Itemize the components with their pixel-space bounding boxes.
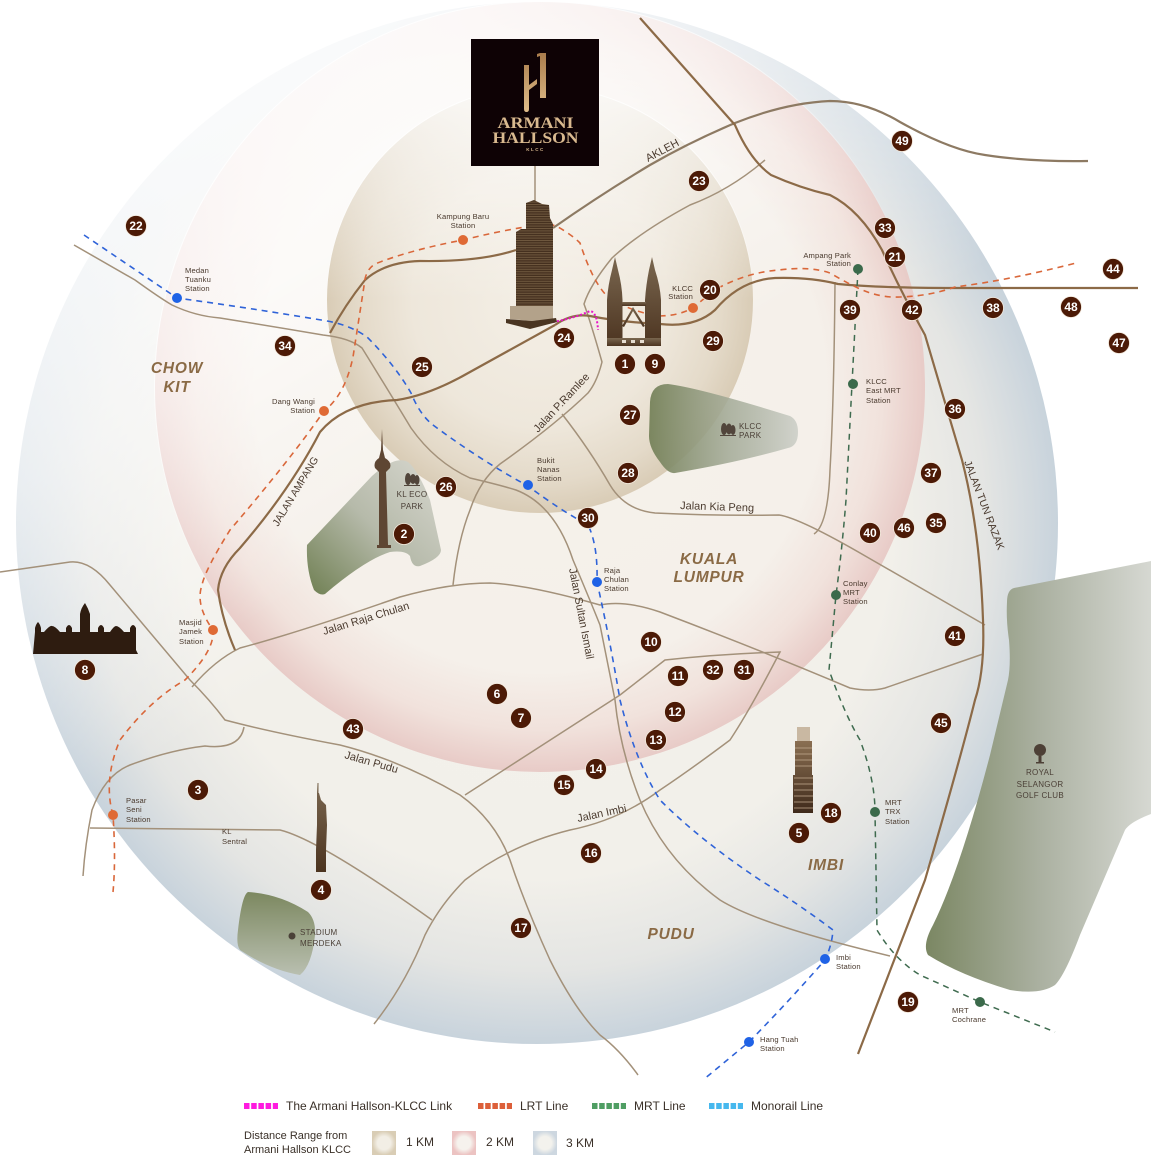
numbered markers: 2: [401, 527, 408, 541]
station labels: Station: [290, 406, 315, 415]
numbered markers: 28: [621, 466, 635, 480]
numbered markers: 22: [129, 219, 143, 233]
numbered markers: 16: [584, 846, 598, 860]
legend: 3 KM swatch: [533, 1131, 594, 1155]
numbered markers: 24: [557, 331, 571, 345]
park: Stadium Merdeka: [237, 892, 315, 975]
legend: distance range caption: Armani Hallson KLCC: [244, 1144, 351, 1156]
station labels: Station: [760, 1044, 785, 1053]
station labels: Station: [604, 584, 629, 593]
road labels: Jalan Imbi: [576, 803, 628, 825]
road labels: Jalan Kia Peng: [680, 500, 754, 515]
numbered markers: 32: [706, 663, 720, 677]
numbered markers: 39: [843, 303, 857, 317]
station labels: Kampung Baru: [437, 212, 489, 221]
park: Royal Selangor Golf Club: [926, 561, 1151, 992]
station labels: MRT: [885, 798, 902, 807]
numbered markers: 30: [581, 511, 595, 525]
building: Petronas Twin Towers: [607, 257, 661, 346]
numbered markers: 13: [649, 733, 663, 747]
station labels: Nanas: [537, 465, 560, 474]
label: Stadium Merdeka: MERDEKA: [300, 939, 342, 948]
label: Royal Selangor Golf Club: ROYAL: [1026, 768, 1054, 777]
station labels: Station: [179, 637, 204, 646]
station labels: Station: [185, 284, 210, 293]
road labels: Jalan P.Ramlee: [531, 371, 592, 435]
building: Sultan Abdul Samad: [33, 603, 138, 654]
numbered markers: 40: [863, 526, 877, 540]
logo: Armani Hallson KLCC: [471, 39, 599, 166]
road labels: AKLEH: [644, 137, 681, 165]
legend: [244, 1099, 823, 1156]
district labels: PUDU: [647, 926, 695, 943]
MRT line: [829, 269, 1055, 1032]
legend: Monorail line: Monorail Line: [751, 1099, 823, 1113]
icon: KLCC Park trees: [720, 423, 736, 436]
numbered markers: 5: [796, 826, 803, 840]
road labels: Jalan Sultan Ismail: [566, 567, 595, 660]
station labels: Medan: [185, 266, 209, 275]
numbered markers: 31: [737, 663, 751, 677]
numbered markers: 14: [589, 762, 603, 776]
station labels: Seni: [126, 805, 142, 814]
numbered markers: 33: [878, 221, 892, 235]
numbered markers: 15: [557, 778, 571, 792]
station labels: Station: [843, 597, 868, 606]
station labels: Dang Wangi: [272, 397, 315, 406]
station labels: Station: [451, 221, 475, 230]
icon: golf ball: [1034, 744, 1046, 764]
label: Royal Selangor Golf Club: GOLF CLUB: [1016, 791, 1064, 800]
road labels: Jalan Pudu: [343, 749, 399, 776]
legend: distance range caption: Distance Range from: [244, 1130, 347, 1142]
station labels: Tuanku: [185, 275, 211, 284]
numbered markers: 48: [1064, 300, 1078, 314]
logo: Armani Hallson KLCC: HALLSON: [492, 130, 579, 147]
legend: 2 KM swatch: [452, 1131, 514, 1155]
numbered markers: 35: [929, 516, 943, 530]
station labels: Station: [668, 292, 693, 301]
road labels: JALAN TUN RAZAK: [961, 459, 1006, 552]
station labels: [126, 212, 986, 1053]
legend: MRT line: [592, 1099, 686, 1113]
numbered markers: 6: [494, 687, 501, 701]
range circle: 1 KM: [326, 86, 754, 514]
station labels: KLCC: [866, 377, 887, 386]
station labels: Station: [126, 815, 151, 824]
numbered markers: 38: [986, 301, 1000, 315]
The Armani Hallson-KLCC link: [553, 311, 598, 330]
station labels: Station: [836, 962, 861, 971]
numbered markers: 23: [692, 174, 706, 188]
station labels: Conlay: [843, 579, 868, 588]
numbered markers: 8: [82, 663, 89, 677]
numbered markers: 36: [948, 402, 962, 416]
label: KLCC Park: PARK: [739, 431, 762, 440]
numbered markers: 20: [703, 283, 717, 297]
roads: major highways: [218, 18, 1138, 1054]
legend: LRT line: [478, 1099, 569, 1113]
logo: Armani Hallson KLCC: KLCC: [526, 147, 545, 152]
numbered markers: 34: [278, 339, 292, 353]
legend: MRT line: MRT Line: [634, 1099, 686, 1113]
legend: Armani Hallson-KLCC link: The Armani Hallson-KLCC Link: [286, 1099, 453, 1113]
numbered markers: 12: [668, 705, 682, 719]
numbered markers: 47: [1112, 336, 1126, 350]
station labels: KLCC: [672, 284, 693, 293]
park: KL Eco Park: [307, 460, 441, 594]
numbered markers: 29: [706, 334, 720, 348]
label: Royal Selangor Golf Club: [1016, 768, 1064, 800]
station labels: TRX: [885, 807, 901, 816]
numbered markers: 7: [518, 711, 525, 725]
legend: 2 KM swatch: 2 KM: [486, 1135, 514, 1149]
range circle: 2 KM: [154, 1, 926, 773]
station labels: Raja: [604, 566, 621, 575]
Monorail line: [84, 235, 833, 1080]
numbered markers: 43: [346, 722, 360, 736]
station labels: Imbi: [836, 953, 851, 962]
numbered markers: [74, 130, 1130, 1012]
legend: 3 KM swatch: 3 KM: [566, 1136, 594, 1150]
numbered markers: 41: [948, 629, 962, 643]
station labels: Station: [537, 474, 562, 483]
numbered markers: 1: [622, 357, 629, 371]
legend: 1 KM swatch: 1 KM: [406, 1135, 434, 1149]
numbered markers: 27: [623, 408, 637, 422]
numbered markers: 19: [901, 995, 915, 1009]
label: Stadium Merdeka: [300, 928, 342, 948]
numbered markers: 18: [824, 806, 838, 820]
station labels: Masjid: [179, 618, 202, 627]
label: Stadium Merdeka: STADIUM: [300, 928, 338, 937]
label: Royal Selangor Golf Club: SELANGOR: [1017, 780, 1063, 789]
numbered markers: 26: [439, 480, 453, 494]
station labels: Hang Tuah: [760, 1035, 799, 1044]
numbered markers: 9: [652, 357, 659, 371]
station labels: Jamek: [179, 627, 202, 636]
road labels: JALAN AMPANG: [271, 455, 321, 529]
district labels: IMBI: [808, 857, 844, 874]
district labels: LUMPUR: [673, 569, 745, 586]
station labels: Chulan: [604, 575, 629, 584]
station labels: Ampang Park: [803, 251, 851, 260]
station labels: East MRT: [866, 386, 901, 395]
numbered markers: 11: [672, 669, 685, 683]
district labels: [151, 360, 844, 943]
station labels: Pasar: [126, 796, 147, 805]
road labels: Jalan Raja Chulan: [321, 600, 411, 638]
logo: Armani Hallson KLCC: ARMANI: [498, 115, 574, 132]
legend: distance range caption: [244, 1130, 351, 1156]
building: KL Tower: [374, 429, 391, 548]
roads: thin streets: [0, 160, 985, 1075]
label: KL Eco Park: [397, 490, 427, 511]
numbered markers: 46: [897, 521, 911, 535]
LRT line: [109, 224, 1076, 892]
numbered markers: 49: [895, 134, 909, 148]
label: KLCC Park: [739, 422, 762, 440]
numbered markers: 42: [905, 303, 919, 317]
numbered markers: 21: [888, 250, 902, 264]
district labels: KIT: [163, 379, 191, 396]
numbered markers: 3: [195, 783, 202, 797]
legend: Monorail line: [709, 1099, 823, 1113]
legend: 1 KM swatch: [372, 1131, 434, 1155]
station dots: [108, 235, 985, 1047]
numbered markers: 10: [644, 635, 658, 649]
district labels: KUALA: [680, 551, 738, 568]
numbered markers: 4: [318, 883, 325, 897]
numbered markers: 44: [1106, 262, 1120, 276]
station labels: Station: [885, 817, 910, 826]
station labels: MRT: [952, 1006, 969, 1015]
building: Merdeka 118: [316, 783, 327, 872]
station labels: Cochrane: [952, 1015, 986, 1024]
station labels: MRT: [843, 588, 860, 597]
label: KL Eco Park: PARK: [401, 502, 424, 511]
icon: KL Eco Park trees: [404, 473, 420, 486]
station labels: Bukit: [537, 456, 555, 465]
park: KLCC Park: [649, 384, 798, 473]
road labels: [271, 137, 1006, 825]
station labels: Station: [866, 396, 891, 405]
label: KL Eco Park: KL ECO: [397, 490, 427, 499]
numbered markers: 37: [924, 466, 938, 480]
numbered markers: 45: [934, 716, 948, 730]
numbered markers: 17: [514, 921, 528, 935]
legend: LRT line: LRT Line: [520, 1099, 569, 1113]
numbered markers: 25: [415, 360, 429, 374]
label: KLCC Park: KLCC: [739, 422, 762, 431]
district labels: CHOW: [151, 360, 204, 377]
station labels: Station: [826, 259, 851, 268]
building: Armani Hallson tower: [506, 200, 557, 329]
building: The Exchange 106: [793, 727, 813, 813]
station labels: Sentral: [222, 837, 247, 846]
station labels: KL: [222, 827, 232, 836]
